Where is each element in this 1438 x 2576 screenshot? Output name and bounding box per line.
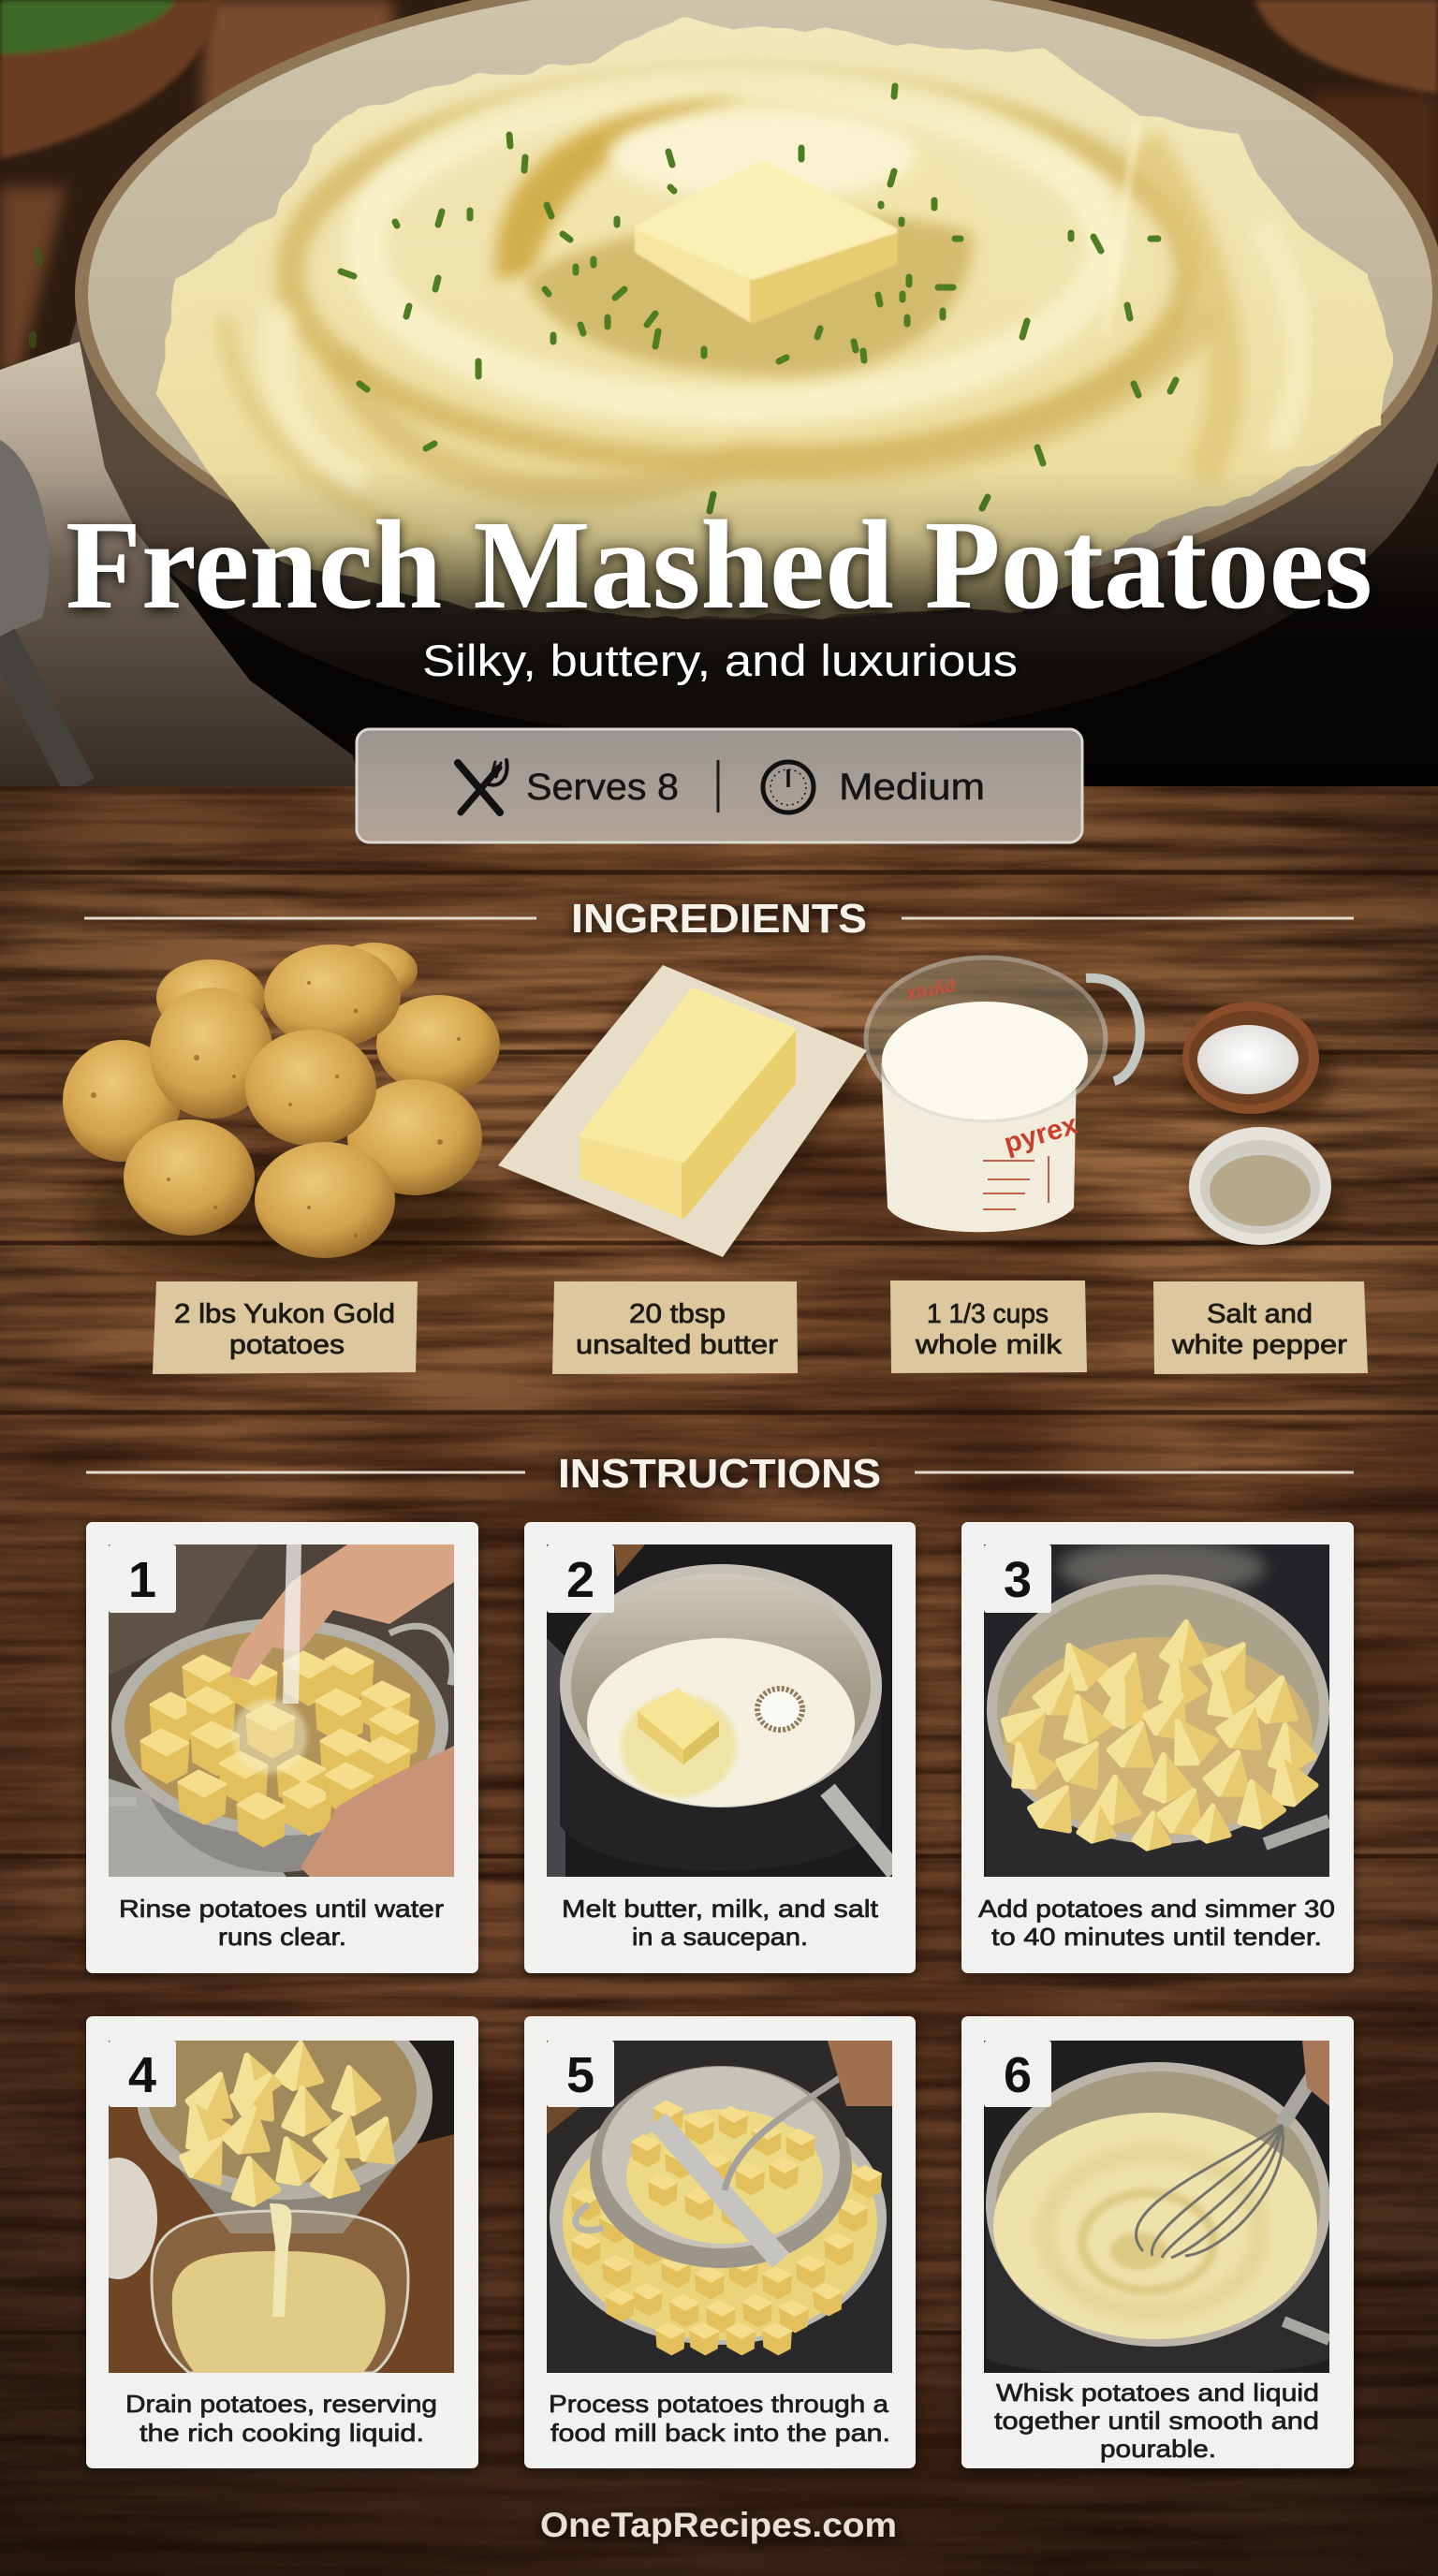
chives [341, 86, 1176, 511]
step caption [119, 1895, 444, 1951]
step caption: in a saucepan. [632, 1923, 808, 1951]
label: potatoes [153, 1281, 418, 1374]
step number [547, 2041, 614, 2107]
step card 2 [524, 1522, 916, 1973]
step number [109, 2041, 176, 2107]
heading: ingredients: INGREDIENTS [571, 896, 867, 942]
step card 6 [961, 2016, 1354, 2468]
mashed potato mound [156, 17, 1390, 618]
step number [547, 1544, 614, 1613]
step number: 5 [566, 2047, 594, 2103]
subtitle: Silky, buttery, and luxurious [422, 636, 1018, 685]
label: butter: unsalted butter [576, 1330, 778, 1360]
step caption: to 40 minutes until tender. [991, 1923, 1322, 1951]
label: milk [890, 1281, 1087, 1373]
servings text: Serves 8 [526, 767, 679, 808]
photo: whisking mashed potatoes [984, 2041, 1330, 2377]
step number: 3 [1004, 1552, 1032, 1608]
label: pyrex logo: pyrex [1001, 1109, 1081, 1160]
step caption [125, 2390, 437, 2447]
ingredient: butter on parchment [498, 965, 871, 1264]
info pill: servings and difficulty [357, 729, 1082, 842]
step caption: Process potatoes through a [549, 2390, 889, 2418]
label: potatoes: 2 lbs Yukon Gold [174, 1299, 395, 1329]
step caption: Whisk potatoes and liquid [996, 2378, 1319, 2407]
step caption: runs clear. [218, 1923, 346, 1951]
dark title gradient [125, 483, 1438, 786]
step number [109, 1544, 176, 1613]
icon: chive bowl [0, 0, 220, 159]
label: butter: 20 tbsp [629, 1299, 726, 1329]
label: salt and pepper: white pepper [1171, 1330, 1347, 1360]
photo: draining potatoes over a glass bowl [79, 1994, 454, 2373]
wood table background [0, 786, 1438, 2576]
difficulty text: Medium [839, 767, 985, 808]
photo: rinsing potatoes in colander [109, 1544, 454, 1877]
step number: 6 [1004, 2047, 1032, 2103]
butter pat [638, 163, 895, 321]
step number [984, 2041, 1051, 2107]
hero photo: mashed potatoes in a bowl [0, 0, 1438, 786]
step card 3 [961, 1522, 1354, 1973]
ingredient: bowl of salt [1182, 1002, 1334, 1123]
label: milk: whole milk [915, 1330, 1063, 1360]
ingredient: milk in measuring cup: pyrex [904, 976, 958, 1005]
ingredient: bowl of white pepper [1189, 1127, 1343, 1251]
label: butter [552, 1281, 798, 1374]
photo: food mill over pan [547, 2031, 902, 2373]
step number: 2 [566, 1552, 594, 1608]
step caption [562, 1895, 879, 1951]
step caption: Rinse potatoes until water [119, 1895, 444, 1923]
step caption [978, 1895, 1335, 1951]
step caption: food mill back into the pan. [550, 2419, 890, 2447]
step caption [994, 2378, 1319, 2463]
icon: fork and knife [458, 760, 507, 812]
step number [984, 1544, 1051, 1613]
photo: melting butter and milk in saucepan [547, 1544, 895, 1877]
napkin [0, 342, 360, 786]
label: milk: 1 1/3 cups [927, 1299, 1049, 1329]
ingredient: potatoes [63, 943, 506, 1278]
step card 5 [524, 2016, 916, 2468]
step caption: the rich cooking liquid. [139, 2419, 424, 2447]
spoon [0, 440, 80, 786]
label: salt and pepper: Salt and [1207, 1299, 1313, 1329]
icon: clock [763, 762, 814, 812]
bowl [66, 0, 1438, 741]
label: potatoes: potatoes [229, 1330, 345, 1360]
footer website: OneTapRecipes.com [540, 2506, 897, 2544]
step caption: Drain potatoes, reserving [125, 2390, 437, 2418]
photo: simmering potatoes [984, 1540, 1329, 1877]
step caption: Melt butter, milk, and salt [562, 1895, 879, 1923]
step caption: pourable. [1100, 2435, 1216, 2463]
step caption [549, 2390, 890, 2447]
step caption: together until smooth and [994, 2407, 1319, 2435]
label: salt and pepper [1153, 1281, 1368, 1374]
step card 4 [79, 1994, 478, 2468]
step number: 4 [128, 2047, 156, 2103]
step number: 1 [128, 1552, 156, 1608]
icon: wooden dish [1255, 0, 1438, 94]
title: French Mashed Potatoes [66, 495, 1372, 636]
step caption: Add potatoes and simmer 30 [978, 1895, 1335, 1923]
step card 1 [86, 1522, 478, 1973]
ingredient: milk in measuring cup [866, 958, 1140, 1232]
heading: instructions: INSTRUCTIONS [558, 1451, 881, 1497]
